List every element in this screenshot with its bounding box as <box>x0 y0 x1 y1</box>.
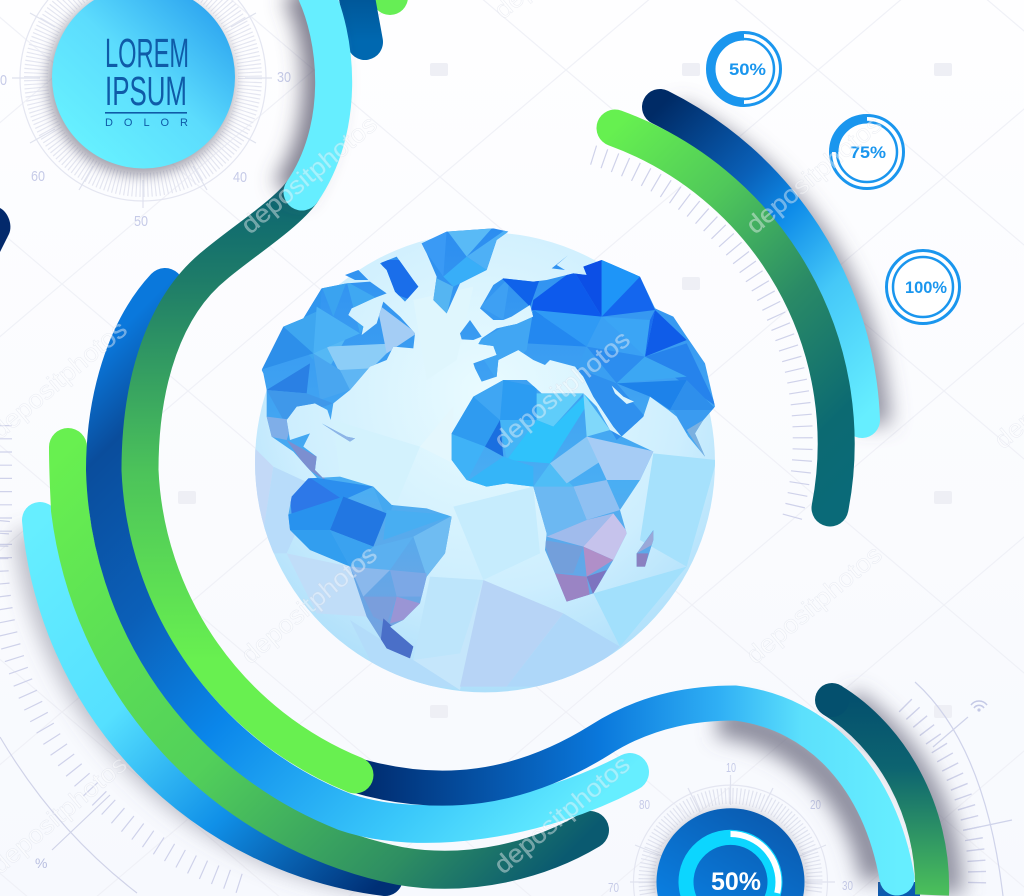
ribbon: teal to bright green S-curve left <box>140 192 355 775</box>
badge: 50% bottom <box>654 808 806 896</box>
scale number 70: 70 <box>608 880 619 895</box>
label 50%: 50% <box>711 868 761 896</box>
ribbon: outer cyan to navy, lower left <box>30 520 385 878</box>
tick arcs: bottom left <box>0 425 248 893</box>
facets: North America <box>260 260 420 480</box>
ribbon: right blue arc <box>660 107 874 425</box>
progress ring 75% <box>830 116 904 188</box>
scale number 60: 60 <box>31 168 45 185</box>
Persian Gulf cutout <box>612 386 634 404</box>
facets: Africa <box>450 380 655 603</box>
scale number partial: 0 <box>0 72 7 89</box>
ribbon: bottom right dark teal <box>815 683 946 896</box>
scale number 30: 30 <box>277 69 291 86</box>
scale number 20: 20 <box>810 797 821 812</box>
scale number 80: 80 <box>639 797 650 812</box>
watermarks: depositphotos <box>741 110 888 240</box>
scale number 50: 50 <box>134 213 148 230</box>
watermarks: depositphotos <box>741 540 888 670</box>
label 100%: 100% <box>905 278 947 297</box>
ribbon: blue to cyan, lower left <box>105 287 630 824</box>
watermarks: depositphotos <box>489 750 636 880</box>
watermarks: depositphotos <box>236 110 383 240</box>
watermarks: depositphotos <box>236 540 383 670</box>
facets: Eurasia <box>473 257 717 460</box>
watermarks: depositphotos <box>489 325 636 455</box>
facets: Greenland <box>420 227 510 315</box>
continents with low-poly facets <box>253 220 720 663</box>
title badge: Lorem Ipsum Dolor <box>47 0 235 176</box>
ribbon: right green arc <box>615 128 836 508</box>
progress ring 50% <box>708 32 780 106</box>
scale number 10: 10 <box>726 760 736 775</box>
title line IPSUM: IPSUM <box>105 68 187 114</box>
gauge: top-left dial with scale <box>0 0 291 230</box>
ribbon: green to teal, lower left <box>68 447 590 870</box>
percent sign: % <box>35 855 47 871</box>
title line LOREM: LOREM <box>105 30 189 76</box>
ribbon: navy to cyan S-curve lower right <box>355 703 897 880</box>
subtitle DOLOR: DOLOR <box>105 117 188 129</box>
tick arc: right of globe <box>593 155 803 525</box>
ribbon: top cyan segment <box>288 0 334 192</box>
facets: South America <box>287 477 453 660</box>
icon: wifi <box>971 701 987 711</box>
progress ring 100% <box>886 250 960 324</box>
label 50%: 50% <box>729 60 766 79</box>
tick arcs and dial: bottom right <box>905 682 1012 896</box>
globe ocean with facets <box>250 232 717 692</box>
left edge navy ribbon fragment <box>0 208 10 252</box>
top dark blue ribbon stub and green stub <box>354 0 408 42</box>
gauge: bottom dial with scale <box>608 760 853 896</box>
scale number 30: 30 <box>842 878 853 893</box>
globe <box>250 220 720 692</box>
scale number 40: 40 <box>233 169 247 186</box>
label 75%: 75% <box>850 143 886 162</box>
